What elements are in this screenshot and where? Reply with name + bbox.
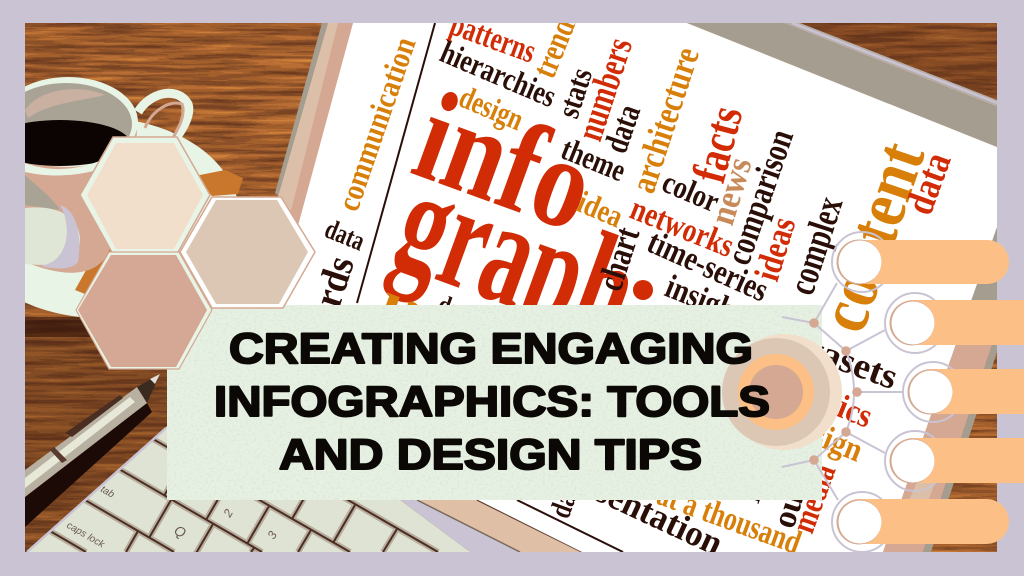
cup rim (25, 77, 138, 167)
key gaps (50, 439, 438, 552)
hexagon: terracotta (76, 252, 212, 369)
word cloud: out (765, 477, 815, 532)
word cloud: networks (625, 190, 739, 265)
word cloud: datasets (767, 315, 903, 397)
list item 5 (832, 492, 1009, 552)
word cloud (320, 23, 951, 552)
tablet bezel (275, 23, 997, 552)
tablet screen (254, 23, 997, 552)
key labels: Q (172, 522, 189, 541)
screen margin lines (357, 23, 623, 552)
word cloud: presentation (545, 449, 729, 563)
word cloud: color (657, 163, 725, 219)
word cloud: design (454, 78, 529, 137)
list item 2 (885, 293, 1024, 353)
coffee (25, 120, 127, 166)
title text: CREATING ENGAGING (229, 325, 753, 373)
word cloud: patterns (445, 6, 541, 71)
coffee cup and saucer (25, 77, 243, 317)
keyboard (29, 426, 470, 552)
word cloud: analytics (757, 358, 877, 435)
word cloud: design (780, 405, 868, 469)
key labels: tab (98, 484, 116, 501)
word cloud: media (785, 459, 843, 538)
key labels: caps lock (64, 520, 107, 551)
word cloud: theme (556, 130, 631, 188)
pen (25, 374, 160, 527)
word cloud: graph (377, 137, 659, 375)
word cloud: content (804, 133, 940, 341)
word cloud: info (398, 64, 613, 259)
word cloud: data (544, 470, 590, 522)
word cloud: communication (330, 32, 423, 215)
word cloud: time-series (642, 224, 774, 309)
word cloud: stats (549, 63, 599, 122)
title text: INFOGRAPHICS: TOOLS (214, 378, 770, 426)
word cloud: ideas (746, 212, 803, 285)
word cloud: facts (682, 101, 753, 188)
list item 1 (832, 232, 1009, 292)
key labels: 2 (220, 506, 236, 520)
word cloud: data (320, 214, 369, 257)
title text: AND DESIGN TIPS (279, 431, 702, 479)
word cloud: chart (590, 222, 647, 295)
connector nodes (809, 318, 862, 465)
key shading (49, 438, 440, 552)
word cloud: hierarchies (435, 33, 562, 114)
word cloud: architecture (623, 42, 707, 197)
word cloud: li (373, 284, 426, 340)
word cloud: idea (572, 183, 629, 234)
saucer (25, 122, 237, 317)
word cloud: comparison (718, 124, 801, 270)
key labels: 3 (264, 528, 280, 542)
word cloud: numbers (569, 33, 641, 146)
word cloud: words (291, 251, 363, 355)
pastry crumbs (75, 170, 243, 300)
title text (214, 325, 770, 479)
word cloud: news (701, 153, 760, 229)
hexagon: light cream (80, 137, 210, 254)
title panel (167, 305, 822, 500)
list item 4 (885, 431, 1024, 491)
word cloud: data (434, 289, 482, 332)
cup body (25, 130, 137, 273)
word cloud: insights (660, 268, 759, 337)
key labels (64, 484, 280, 551)
concentric circle decoration (722, 334, 842, 450)
cup handle (138, 93, 189, 142)
word cloud: r (734, 479, 771, 507)
connector network (782, 283, 902, 500)
hexagon: beige (180, 197, 315, 308)
word cloud: at a thousand (652, 476, 806, 562)
list item 3 (903, 362, 1024, 422)
keyboard edge (27, 428, 166, 552)
word cloud: data (896, 146, 960, 220)
word cloud: complex (781, 192, 851, 300)
word cloud: data (598, 100, 648, 158)
